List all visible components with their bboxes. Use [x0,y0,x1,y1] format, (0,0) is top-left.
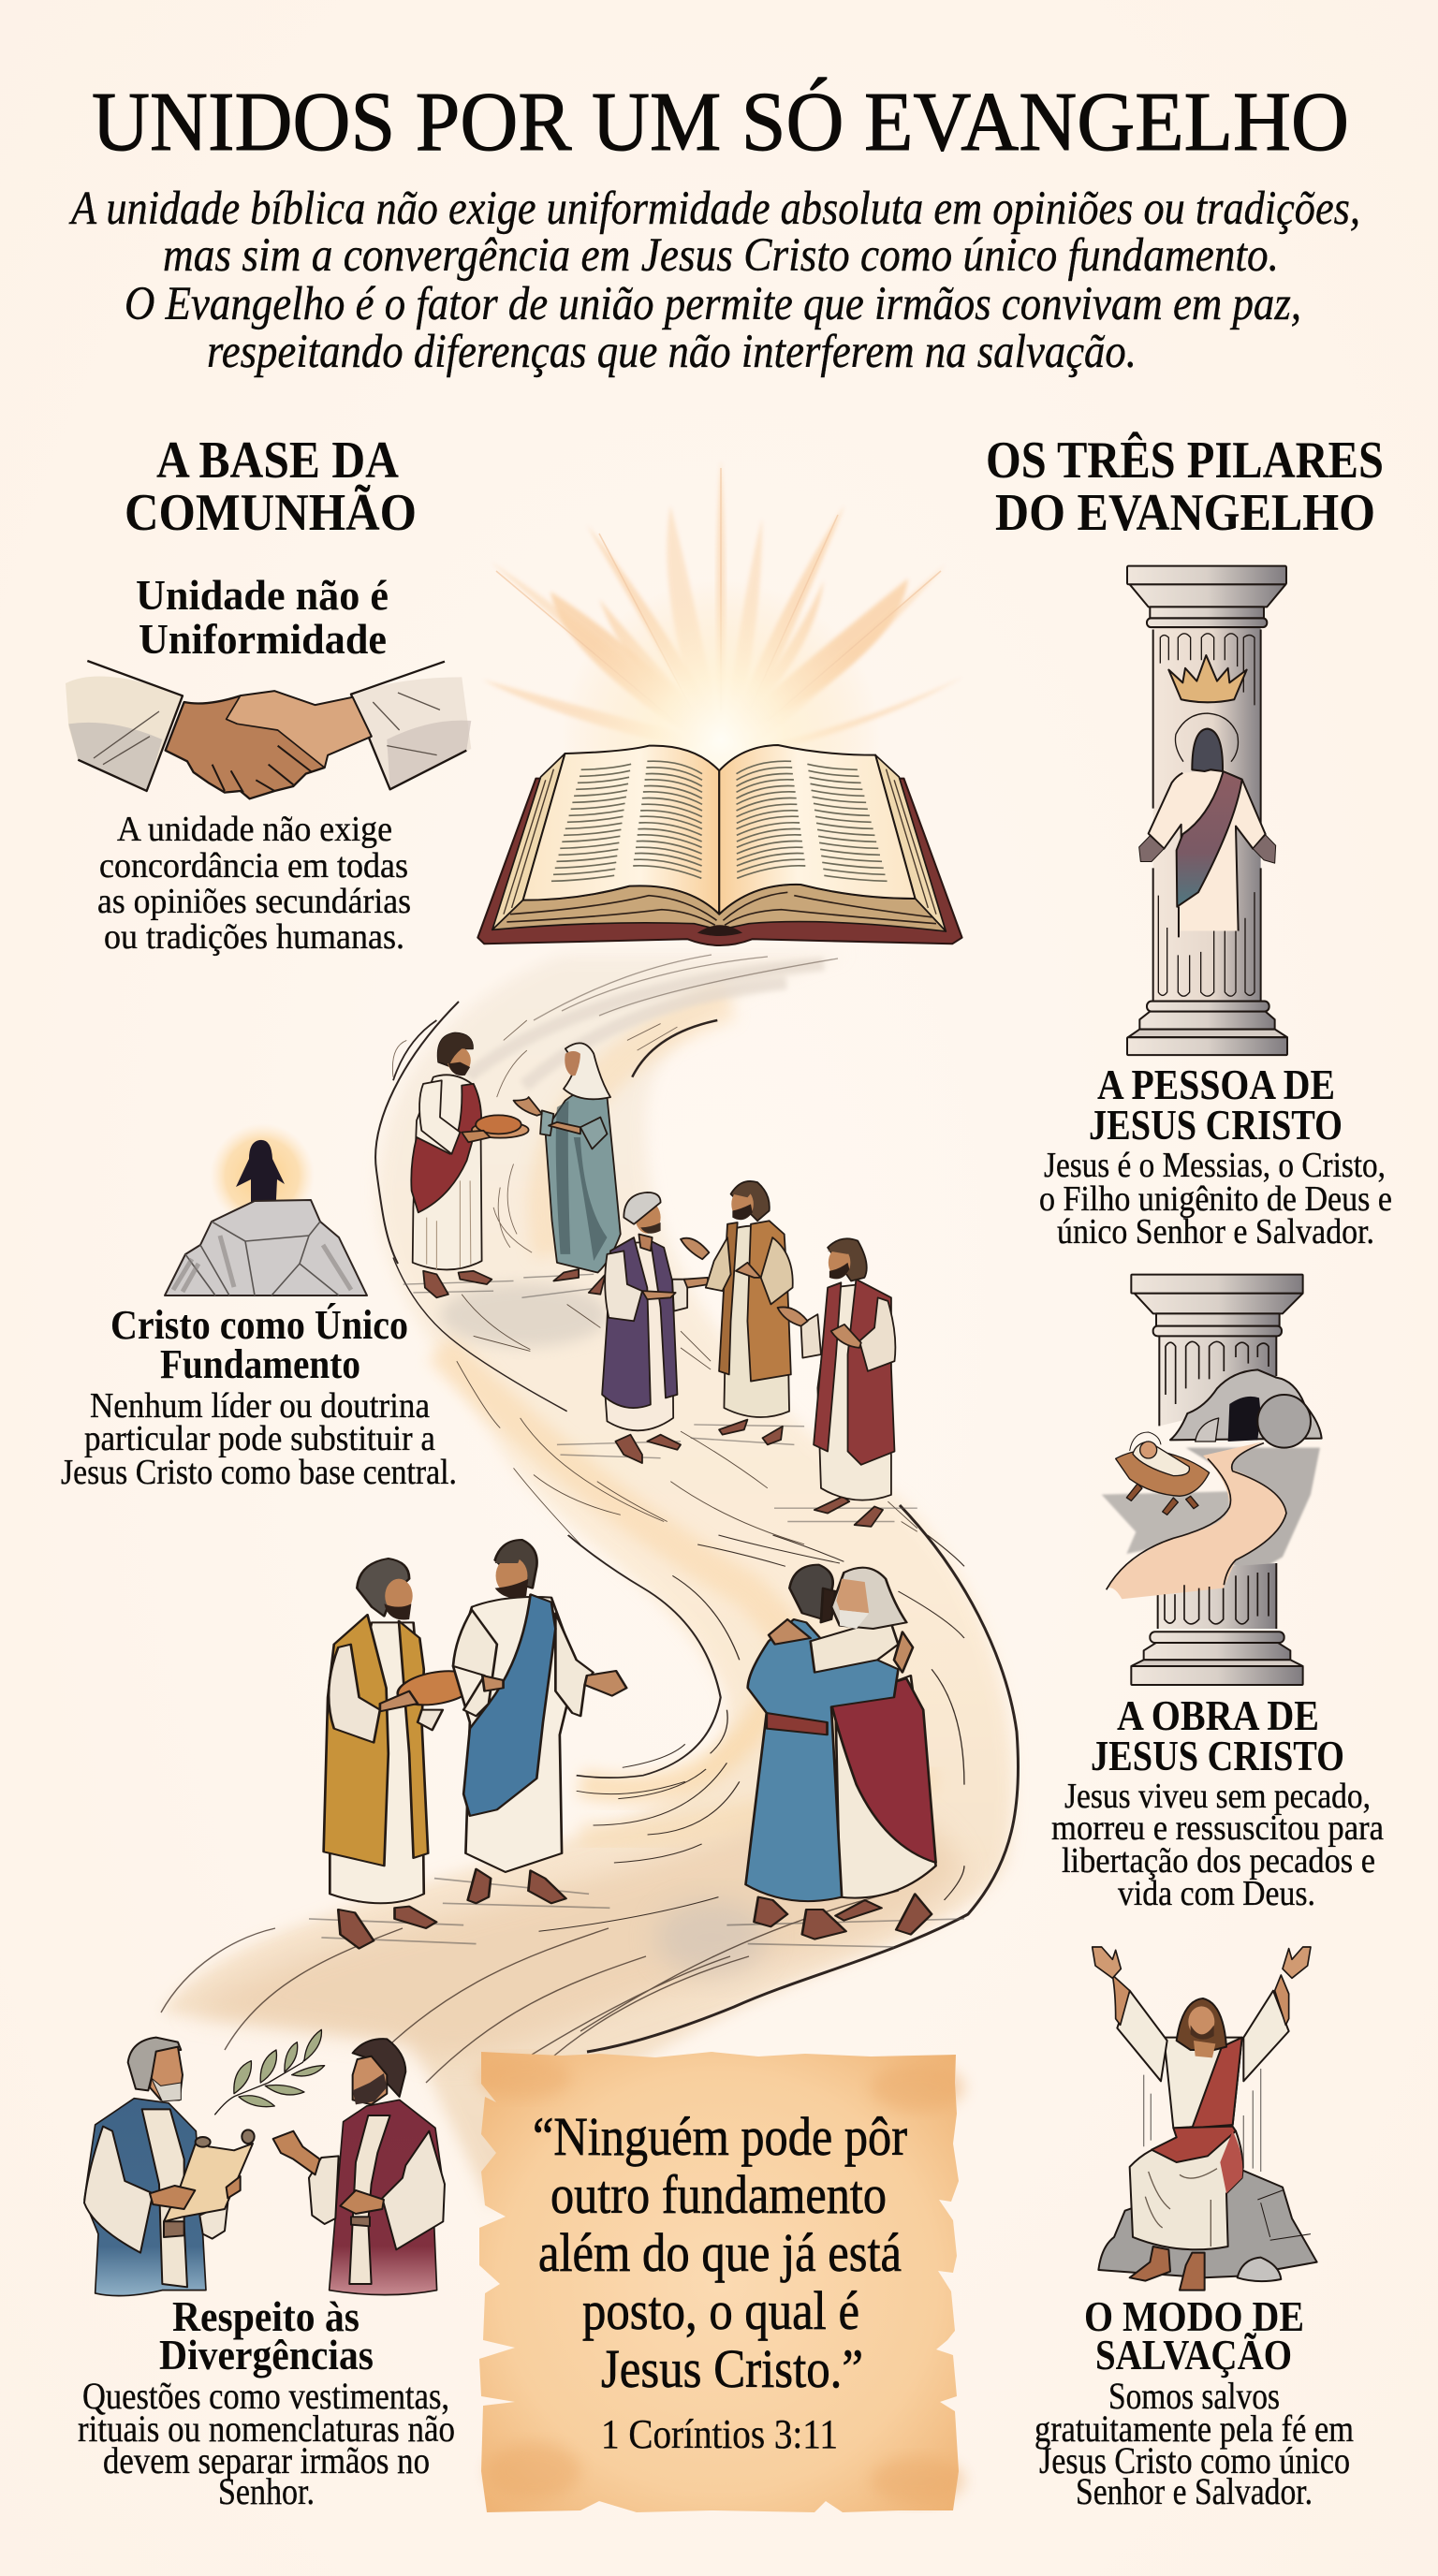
subheading: o modo de salvação: O MODO DE [1084,2292,1304,2340]
figure: woman in teal [514,1043,621,1295]
text: jesus viveu sem pecado: Jesus viveu sem pecado, [1064,1777,1371,1816]
quote text: posto, o qual é [582,2280,859,2341]
text: questões como vestimentas: Senhor. [218,2470,315,2512]
intro paragraph [68,183,1360,378]
road left edge [375,1002,459,1264]
quote text: além do que já está [538,2222,902,2283]
text: jesus é o messias: único Senhor e Salvador. [1057,1212,1374,1251]
intro paragraph: O Evangelho é o fator de união permite que irmãos convivam em paz, [125,278,1301,330]
road lines upper [392,1020,917,1544]
intro paragraph: respeitando diferenças que não interferem na salvação. [207,326,1137,378]
subheading: a obra de jesus cristo: A OBRA DE [1117,1691,1319,1739]
text: somos salvos [1034,2375,1354,2512]
text: a unidade não exige: concordância em todas [99,846,408,886]
illustration: two men and olive branch [84,2029,445,2296]
icon: open book [477,745,962,945]
figure: bearded man with red vest [273,2039,445,2295]
figure: man in red vest [778,1238,895,1527]
text: somos salvos: gratuitamente pela fé em [1034,2408,1354,2450]
subheading: unidade não é uniformidade [136,571,389,663]
text: questões como vestimentas: Questões como vestimentas, [82,2375,449,2417]
subheading: respeito às divergências [159,2292,374,2378]
ground shadows [309,1879,964,1947]
subheading: cristo como único fundamento: Cristo como Único [110,1302,408,1348]
text: a unidade não exige: as opiniões secundárias [97,882,411,921]
subheading: a pessoa de jesus cristo: A PESSOA DE [1097,1061,1335,1108]
reference: 1 Coríntios 3:11 [601,2411,838,2457]
text: jesus é o messias [1039,1146,1392,1251]
panel: respect for differences [78,2029,455,2512]
subheading: o modo de salvação [1084,2292,1304,2378]
text: jesus é o messias: o Filho unigênito de Deus e [1039,1179,1392,1219]
subheading: a obra de jesus cristo [1091,1691,1344,1779]
panel: left column [61,432,471,1492]
text: a unidade não exige: ou tradições humanas. [104,917,404,957]
text: a unidade não exige [97,810,411,957]
icon: handshake [66,661,471,798]
figure: seated christ with raised arms [1093,1947,1317,2291]
text: somos salvos: Senhor e Salvador. [1076,2470,1313,2512]
quote text: Jesus Cristo.” [601,2338,863,2399]
quote text: “Ninguém pode pôr [533,2106,907,2167]
icon: rays of light [482,460,963,758]
figure: man in purple vest with turban [602,1193,709,1463]
text: jesus viveu sem pecado: morreu e ressuscitou para [1051,1808,1384,1848]
figure group: sharing and embrace [309,1540,964,1949]
figure: older man with scroll [84,2038,255,2296]
figure: man in blue mantle [453,1540,626,1903]
icon: olive branch [214,2029,325,2115]
figure: man in brown vest [681,1181,793,1444]
subheading: cristo como único fundamento: Fundamento [160,1341,360,1387]
text: questões como vestimentas [78,2375,455,2512]
quote text [533,2106,907,2399]
christ figure [1139,713,1276,937]
quote text: outro fundamento [550,2164,887,2225]
subheading: o modo de salvação: SALVAÇÃO [1095,2331,1292,2378]
text: a unidade não exige: A unidade não exige [117,810,392,849]
subheading: a pessoa de jesus cristo [1089,1061,1343,1149]
text: jesus viveu sem pecado: vida com Deus. [1118,1874,1315,1913]
subheading: respeito às divergências: Respeito às [172,2292,360,2340]
subheading: respeito às divergências: Divergências [159,2331,374,2378]
parchment background [477,2052,964,2512]
heading: a base da comunhão [125,432,417,542]
text: somos salvos: Jesus Cristo como único [1039,2439,1350,2481]
subheading: cristo como único fundamento [110,1302,408,1387]
icon: pillar with christ [1127,566,1287,1055]
heading: os três pilares: OS TRÊS PILARES [986,431,1384,490]
intro paragraph: mas sim a convergência em Jesus Cristo como único fundamento. [163,229,1279,282]
text: nenhum líder: Nenhum líder ou doutrina [90,1386,430,1426]
text: nenhum líder: Jesus Cristo como base central. [61,1453,457,1492]
heading: os três pilares: DO EVANGELHO [995,484,1375,542]
crown [1168,655,1247,702]
icon: pillar with tomb and manger [1102,1275,1322,1685]
figure: two men embracing [745,1565,936,1939]
subheading: unidade não é uniformidade: Unidade não é [136,571,389,619]
icon: radiant glow [562,580,880,899]
subheading: a pessoa de jesus cristo: JESUS CRISTO [1089,1101,1343,1149]
subheading: a obra de jesus cristo: JESUS CRISTO [1091,1732,1344,1779]
text: nenhum líder: particular pode substituir a [84,1419,435,1458]
heading: os três pilares [986,431,1384,542]
panel: right column [986,431,1392,2512]
text: questões como vestimentas: rituais ou nomenclaturas não [78,2408,455,2450]
heading: a base da comunhão: COMUNHÃO [125,484,417,542]
figure: man in red mantle with bread [411,1033,529,1297]
panel: parchment quote [477,2052,964,2512]
text: jesus viveu sem pecado: libertação dos pecados e [1062,1841,1375,1881]
heading: a base da comunhão: A BASE DA [156,432,399,490]
text: nenhum líder [61,1386,457,1492]
winding road [161,955,1019,2209]
manger [1116,1432,1210,1515]
text: jesus viveu sem pecado [1051,1777,1384,1913]
title: UNIDOS POR UM SÓ EVANGELHO [92,76,1349,168]
text: jesus é o messias: Jesus é o Messias, o Cristo, [1044,1146,1386,1185]
icon: christ silhouette on rock [165,1123,367,1295]
ground shadows [404,1274,917,1522]
subheading: unidade não é uniformidade: Uniformidade [139,615,387,663]
text: somos salvos: Somos salvos [1108,2375,1280,2417]
road lines middle [539,1535,964,1931]
figure: man in yellow vest with bread [324,1559,480,1949]
figure group: travellers [404,1033,917,1527]
text: questões como vestimentas: devem separar irmãos no [103,2439,430,2481]
